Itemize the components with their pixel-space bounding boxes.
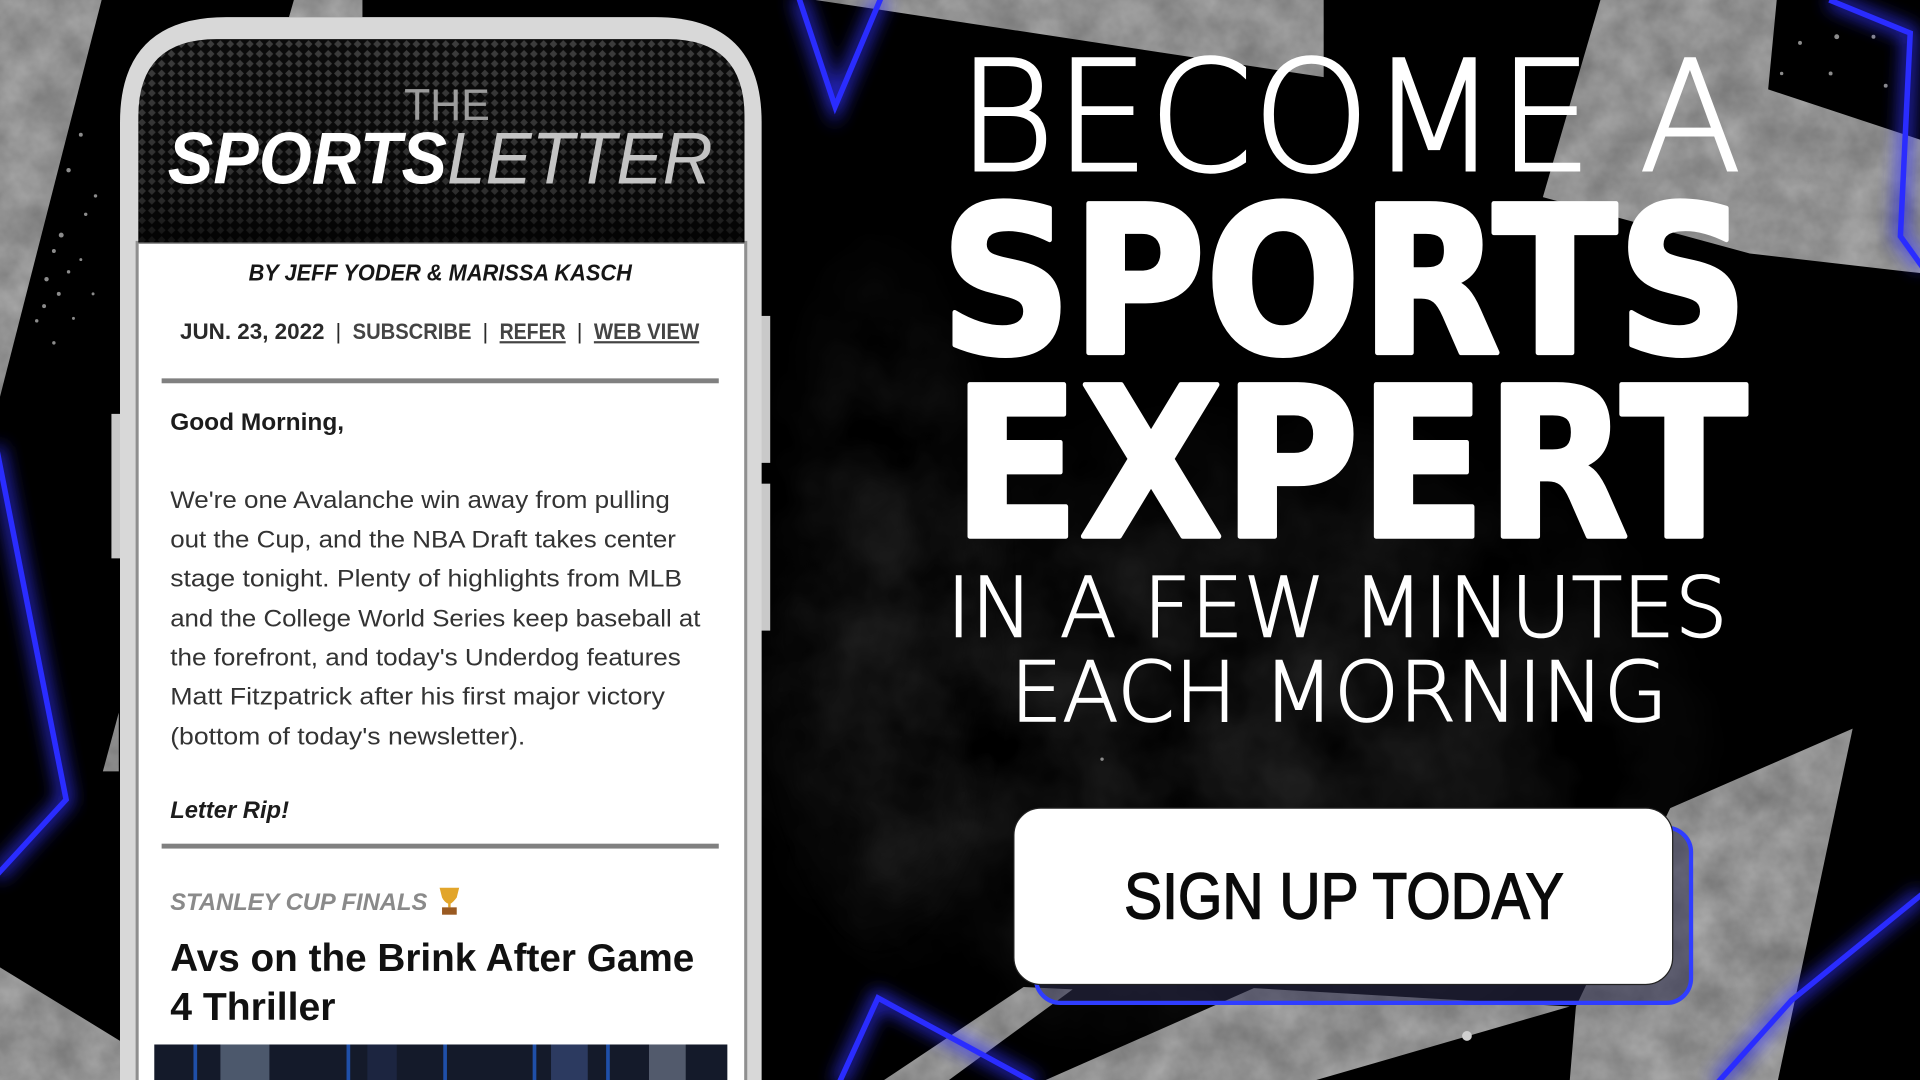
- blue neon line: left: [0, 447, 66, 876]
- logo: The Sportsletter: THE: [404, 81, 490, 130]
- intro paragraph: (bottom of today's newsletter).: [170, 723, 525, 750]
- intro paragraph: stage tonight. Plenty of highlights from MLB: [170, 566, 682, 593]
- date and links row: |: [577, 319, 582, 344]
- subheading: EACH MORNING: [1010, 644, 1668, 741]
- logo: The Sportsletter: LETTER: [447, 117, 713, 200]
- article headline: Avs on the Brink After Game: [170, 937, 694, 980]
- subheading: IN A FEW MINUTES: [947, 560, 1728, 657]
- intro paragraph: [170, 487, 701, 750]
- intro paragraph: We're one Avalanche win away from pulling: [170, 487, 670, 514]
- logo: The Sportsletter: [168, 81, 713, 200]
- button label: SIGN UP TODAY: [1124, 859, 1564, 932]
- blue neon line: top: [798, 0, 882, 107]
- button face: [1014, 808, 1673, 984]
- section label: STANLEY CUP FINALS: [170, 889, 428, 916]
- logo: The Sportsletter: SPORTS: [168, 117, 447, 200]
- intro paragraph: and the College World Series keep baseball at: [170, 605, 701, 632]
- subheading: [947, 560, 1728, 741]
- phone body frame: [120, 17, 762, 1080]
- headline: expert: EXPERT: [953, 344, 1747, 586]
- date and links row: SUBSCRIBE: [353, 319, 471, 344]
- icon: trophy: [440, 888, 459, 915]
- date and links row: REFER: [500, 319, 566, 344]
- headline: become a: BECOME A: [958, 29, 1741, 207]
- blue neon line: top right: [1829, 0, 1920, 267]
- divider bottom: [162, 844, 719, 849]
- intro paragraph: Matt Fitzpatrick after his first major victory: [170, 684, 666, 711]
- date and links row: |: [482, 319, 488, 344]
- headline: sports: SPORTS: [940, 164, 1749, 402]
- date and links row: [180, 319, 699, 344]
- intro paragraph: out the Cup, and the NBA Draft takes center: [170, 526, 676, 553]
- blue neon line: bottom right: [1717, 894, 1920, 1080]
- button offset outline: [1036, 828, 1691, 1003]
- article headline: 4 Thriller: [170, 986, 336, 1029]
- article photo: [154, 1044, 727, 1080]
- background: dark crumpled paper: [710, 220, 1739, 1078]
- date and links row: |: [336, 319, 341, 344]
- phone side buttons: [111, 316, 770, 631]
- newsletter header panel: [138, 39, 744, 242]
- phone screen body: [137, 242, 746, 1080]
- blue neon line: bottom centre: [839, 998, 1036, 1080]
- divider top: [162, 378, 719, 383]
- phone mockup: [111, 17, 770, 1080]
- date and links row: WEB VIEW: [594, 319, 699, 344]
- greeting: Good Morning,: [170, 409, 344, 436]
- sign-off: Letter Rip!: [170, 797, 289, 824]
- article headline: [170, 937, 694, 1029]
- byline: BY JEFF YODER & MARISSA KASCH: [249, 259, 633, 285]
- date and links row: JUN. 23, 2022: [180, 319, 324, 344]
- call-to-action button: [1014, 808, 1691, 1003]
- intro paragraph: the forefront, and today's Underdog features: [170, 645, 681, 672]
